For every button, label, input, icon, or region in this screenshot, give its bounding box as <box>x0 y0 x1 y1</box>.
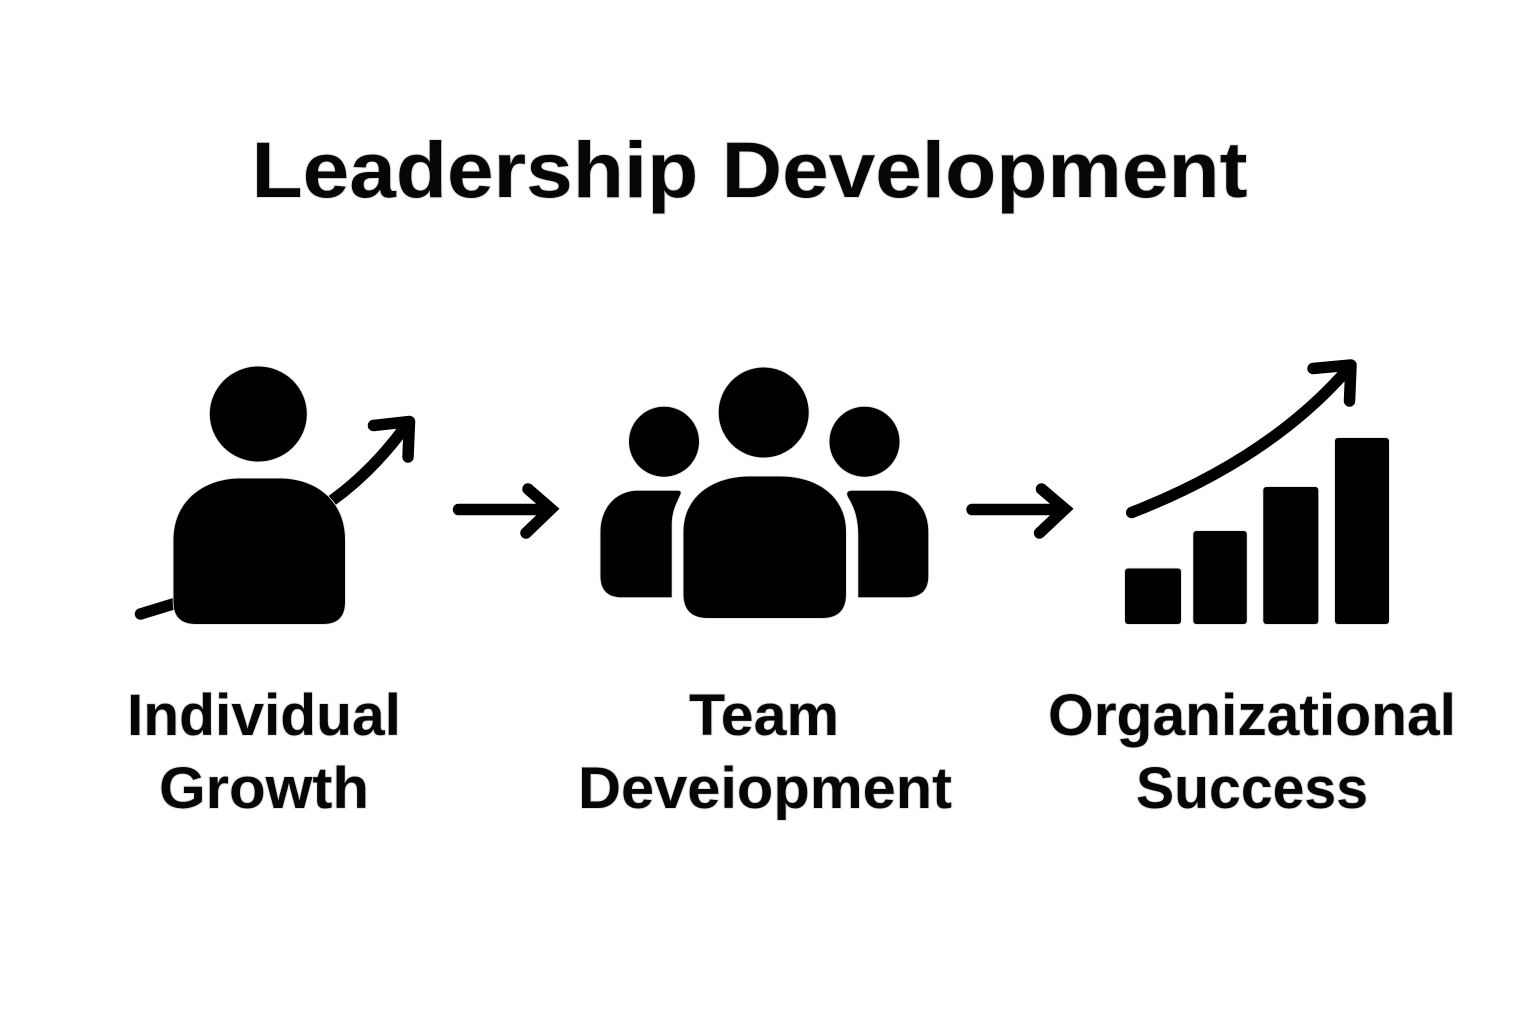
label: individual growth: Growth <box>159 756 369 821</box>
bar 2 <box>1193 531 1247 624</box>
center body <box>684 476 846 618</box>
title: Leadership Development <box>252 125 1248 214</box>
arrow: team to organization <box>972 489 1065 533</box>
left body <box>600 491 681 597</box>
icon: individual growth <box>140 366 410 624</box>
label: organizational success: Success <box>1136 756 1368 821</box>
label: individual growth <box>127 683 401 821</box>
arrow: individual to team <box>458 489 551 533</box>
right body <box>847 491 928 597</box>
icon: organizational success chart <box>1125 365 1389 624</box>
right head <box>830 407 900 477</box>
bar 4 <box>1335 438 1389 624</box>
center head <box>719 368 809 458</box>
person body <box>174 478 345 624</box>
left head <box>629 407 699 477</box>
icon: team <box>600 368 928 618</box>
bar 1 <box>1125 568 1181 624</box>
label: individual growth: Individual <box>127 683 401 748</box>
label: team development: Team <box>689 683 839 748</box>
person head <box>210 366 307 462</box>
label: team development: Deveiopment <box>578 756 952 821</box>
bar 3 <box>1263 487 1318 624</box>
growth line tail <box>140 602 178 614</box>
rising arrow <box>1132 365 1351 512</box>
label: organizational success: Organizational <box>1048 683 1456 748</box>
growth arrow <box>330 422 410 502</box>
label: team development <box>578 683 952 821</box>
label: organizational success <box>1048 683 1456 821</box>
